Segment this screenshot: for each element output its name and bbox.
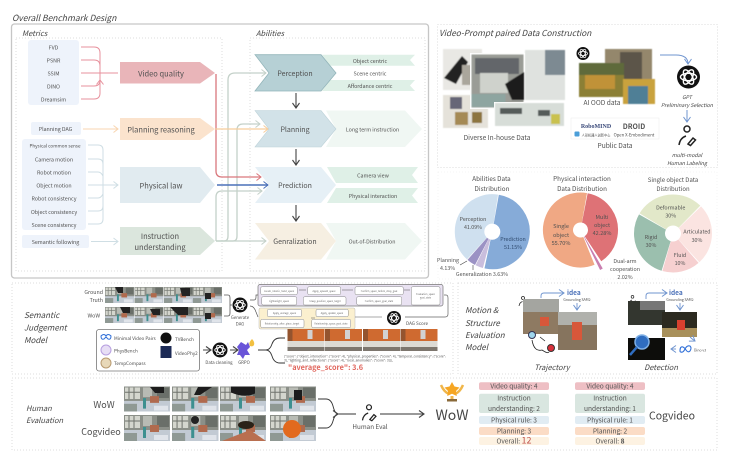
connector: instruction understanding to abilities xyxy=(216,73,266,241)
metric category: instruction understanding: Instruction xyxy=(141,231,179,242)
scores: WoW: Instruction xyxy=(497,392,531,402)
icon: GPT generate DAG xyxy=(232,298,248,312)
pie chart: single object data distribution: 30% xyxy=(646,241,656,249)
pie chart: single object data distribution: 10% xyxy=(675,259,685,267)
heading: human evaluation xyxy=(26,403,64,426)
logo: Grounding SAM2 detection: Grounding SAM2 xyxy=(666,298,694,303)
box: datasets: PhysBench xyxy=(114,348,138,354)
diagram: DAG evaluation: goal_state xyxy=(420,296,432,300)
pie chart: physical interaction data distribution: Physical interaction xyxy=(553,174,611,183)
panel: video-prompt paired data construction xyxy=(438,24,718,168)
metric category: instruction understanding xyxy=(120,227,215,255)
frame: motion dotted box xyxy=(458,283,717,374)
pie chart: physical interaction data distribution: Data Distribution xyxy=(557,184,607,193)
ability: prediction: Camera view xyxy=(357,172,390,180)
metric: planning DAG: Planning DAG xyxy=(39,125,73,133)
metric category: planning reasoning: Planning reasoning xyxy=(127,124,195,136)
ability: generalization: Out-of-Distribution xyxy=(349,238,395,246)
pie chart: physical interaction data distribution: Dual-arm xyxy=(613,257,637,265)
scores: Cogvideo: understanding: 1 xyxy=(584,403,636,413)
ability: perception: Affordance centric xyxy=(348,82,393,90)
icon: GPT DAG score xyxy=(387,311,401,325)
scores: WoW: Overall: 12 xyxy=(496,434,532,447)
box: datasets: TempCompass xyxy=(114,361,146,367)
pie chart: abilities data distribution: Prediction xyxy=(500,235,526,243)
logo: Grounding SAM2 trajectory xyxy=(541,287,591,310)
ability: prediction xyxy=(255,167,418,203)
text: multi-modal human labeling: multi-modal xyxy=(672,152,703,159)
panel: human evaluation xyxy=(12,378,717,450)
connector: physical law to prediction xyxy=(217,184,268,186)
images: detection xyxy=(628,296,697,373)
arrow: cleaning to GRPO xyxy=(230,349,238,351)
frame: abilities dotted box xyxy=(250,38,425,271)
diagram: DAG evaluation: Apply_average_space xyxy=(273,311,297,315)
box: datasets: TVBench xyxy=(175,336,194,343)
metric: semantic following: Semantic following xyxy=(32,238,79,246)
caption: Diverse In-house Data xyxy=(464,132,531,142)
arrow: human eval to results xyxy=(380,413,424,415)
scores: Cogvideo: Planning: 2 xyxy=(593,426,628,436)
panel: overall benchmark design xyxy=(12,12,428,278)
text: generate DAG xyxy=(231,315,250,328)
metric category: instruction understanding: understanding xyxy=(134,242,186,253)
box: datasets xyxy=(96,330,200,371)
logos: public data: Open X-Embodiment xyxy=(614,132,655,138)
video strip: generated frames xyxy=(288,329,438,351)
metrics: physical law group: Robot motion xyxy=(37,168,71,176)
label: metrics: Metrics xyxy=(22,28,49,39)
pie chart: physical interaction data distribution: object xyxy=(594,221,610,229)
arrow: to GPT selection xyxy=(660,55,688,64)
text: generate DAG: Generate xyxy=(231,315,250,321)
diagram: DAG evaluation: Confirm_space_before_drop_goal xyxy=(361,289,398,293)
metric category: video quality: Video quality xyxy=(138,68,184,80)
pie chart: abilities data distribution: Abilities Data xyxy=(472,174,511,183)
scores: WoW: Video quality: 4 xyxy=(490,380,538,390)
metrics: physical law group: Scene consistency xyxy=(32,221,77,229)
pie chart: physical interaction data distribution: Multi xyxy=(596,213,609,221)
metrics: video quality group: SSIM xyxy=(47,70,60,78)
text: DAG score: DAG Score xyxy=(406,321,428,327)
heading: data construction: Video-Prompt paired Data Construction xyxy=(439,27,592,39)
text: multi-modal human labeling: Human Labeling xyxy=(667,160,708,167)
heading: human evaluation: Human xyxy=(26,403,52,414)
pie chart: single object data distribution: Deformable xyxy=(656,204,685,212)
brace: strips to human eval xyxy=(318,399,356,428)
logos: public data xyxy=(571,118,659,150)
text: GPT preliminary selection xyxy=(661,94,714,109)
frame: data construction dotted box xyxy=(438,24,718,168)
metrics: video quality group: FVD xyxy=(49,44,59,52)
metrics: video quality group: Dreamsim xyxy=(41,96,66,104)
scores: WoW: Physical rule: 3 xyxy=(491,414,537,424)
text: multi-modal human labeling xyxy=(667,152,708,167)
logo: Grounding SAM2 detection xyxy=(646,287,694,310)
video strip: WoW xyxy=(87,307,222,323)
panel: motion and structure evaluation model xyxy=(458,283,717,374)
pie chart: single object data distribution: Single object Data xyxy=(648,175,698,184)
scores: WoW: understanding: 2 xyxy=(488,403,540,413)
logos: public data: 人形机器人创新中心 xyxy=(582,132,611,138)
pie chart: single object data distribution: 30% xyxy=(692,236,702,244)
arrow: datasets to cleaning xyxy=(203,349,211,351)
diagram: DAG evaluation: Apply_upward_space xyxy=(312,289,336,293)
video strip: Cogvideo xyxy=(81,415,316,441)
frame: distribution dotted box xyxy=(438,172,717,279)
panel: data distributions xyxy=(437,172,717,281)
pie chart: abilities data distribution: 4.13% xyxy=(440,264,455,272)
metric: semantic following xyxy=(22,235,118,248)
video strip: Cogvideo: Cogvideo xyxy=(81,425,121,438)
pie chart: single object data distribution xyxy=(640,175,711,267)
ability: prediction: Prediction xyxy=(278,181,312,191)
metrics: video quality group: PSNR xyxy=(47,56,61,64)
metric category: physical law xyxy=(120,167,215,203)
video strip: ground truth xyxy=(84,287,222,304)
box: datasets: Minimal Video Pairs xyxy=(114,335,156,342)
text: score json: 3}, "lighting_and_reflections": {"score": 4}, "local_anomalies": {"score": 3}}}, xyxy=(284,358,393,362)
heading: human evaluation: Evaluation xyxy=(26,415,64,426)
pie chart: physical interaction data distribution: object xyxy=(553,231,569,239)
diagram: DAG evaluation: Locate_robotic_hand_space xyxy=(264,289,295,293)
logo: Meta Dino v3: Dino v3 xyxy=(694,348,706,354)
logo: Grounding SAM2 detection: idea xyxy=(669,287,683,297)
icon: human labeling xyxy=(679,126,696,146)
pie chart: physical interaction data distribution: 2.02% xyxy=(617,273,633,281)
text: data cleaning: Data cleaning xyxy=(205,360,233,366)
frame: human evaluation dotted box xyxy=(12,378,717,450)
scores: WoW xyxy=(479,380,549,447)
heading: semantic judgement model: Judgement xyxy=(24,322,68,334)
video strip: ground truth: Truth xyxy=(90,296,103,304)
pie chart: physical interaction data distribution xyxy=(545,174,640,281)
logo: Meta Dino v3 xyxy=(671,337,706,354)
pie chart: physical interaction data distribution: Single xyxy=(553,222,569,230)
image collage: in-house data xyxy=(443,49,565,142)
heading: motion and structure evaluation model: Structure xyxy=(465,318,501,329)
metric: planning DAG xyxy=(31,122,118,135)
logo: Grounding SAM2 trajectory: Grounding SAM2 xyxy=(563,298,591,303)
pie chart: single object data distribution: Rigid xyxy=(645,233,657,241)
pie chart: abilities data distribution: Generalization 3.63% xyxy=(456,270,508,278)
scores: Cogvideo: Instruction xyxy=(593,392,627,402)
frame: semantic dotted box xyxy=(12,283,453,374)
ability: prediction: Physical interaction xyxy=(349,192,397,200)
pie chart: abilities data distribution: Planning xyxy=(437,256,459,264)
text: GPT preliminary selection: GPT xyxy=(682,94,693,101)
ability: generalization: Genralization xyxy=(273,237,317,247)
metrics: physical law group: Robot consistency xyxy=(32,194,77,202)
ability: perception: Scene centric xyxy=(354,70,387,78)
label: WoW winner: WoW xyxy=(435,405,469,425)
caption: Public Data xyxy=(598,140,633,150)
brace: GRPO outputs xyxy=(258,338,285,363)
scores: Cogvideo: Video quality: 4 xyxy=(586,380,634,390)
pie chart: single object data distribution: Articulated xyxy=(683,228,711,236)
heading: semantic judgement model: Semantic xyxy=(24,310,60,321)
connector: planning reasoning to planning xyxy=(215,128,268,130)
pie chart: abilities data distribution: 41.09% xyxy=(464,223,482,231)
metrics: physical law group: Physical common sense xyxy=(29,142,81,150)
icon: GRPO xyxy=(237,339,254,366)
logos: public data: DROID xyxy=(623,122,645,132)
text: human eval: Human Eval xyxy=(352,422,388,431)
pie chart: physical interaction data distribution: 42.28% xyxy=(593,229,611,237)
ability: perception: Perception xyxy=(277,69,313,79)
caption: AI OOD data xyxy=(584,97,621,107)
ability: perception: Object centric xyxy=(353,57,387,65)
frame: metrics dotted box xyxy=(16,38,222,271)
pie chart: physical interaction data distribution: cooperation xyxy=(610,265,640,273)
icon: GPT data cleaning xyxy=(212,342,228,358)
callout: average score: "average_score": 3.6 xyxy=(288,363,363,373)
box: datasets: VideoPhy2 xyxy=(175,350,198,357)
text: generate DAG: DAG xyxy=(236,322,244,328)
metrics: physical law group xyxy=(22,139,118,230)
metric category: planning reasoning xyxy=(120,118,215,140)
video strip: ground truth: Ground xyxy=(84,288,103,296)
brace: strips to DAG generation xyxy=(224,295,232,316)
metrics: video quality group xyxy=(28,40,118,105)
images: trajectory: Trajectory xyxy=(534,362,571,373)
scores: WoW: Planning: 3 xyxy=(497,426,532,436)
images: trajectory xyxy=(519,296,597,373)
connector: video quality to prediction xyxy=(216,74,261,177)
metrics: physical law group: Camera motion xyxy=(35,156,73,164)
ability: planning: Planning xyxy=(280,125,310,135)
pie chart: abilities data distribution xyxy=(437,174,526,278)
arrows: abilities flow xyxy=(295,93,297,221)
pie chart: physical interaction data distribution: 55.70% xyxy=(552,239,570,247)
logo: Grounding SAM2 trajectory: idea xyxy=(567,287,581,297)
metrics: physical law group: Object motion xyxy=(36,182,72,190)
panel: semantic judgement model xyxy=(12,283,453,374)
pie chart: abilities data distribution: 51.15% xyxy=(504,243,522,251)
scores: Cogvideo: Overall: 8 xyxy=(596,436,625,446)
heading: motion and structure evaluation model: Motion & xyxy=(465,305,500,316)
metrics: physical law group: Object consistency xyxy=(31,208,77,216)
video strip: WoW: WoW xyxy=(93,398,115,411)
heading: motion and structure evaluation model: Model xyxy=(465,342,490,353)
pie chart: single object data distribution: Fluid xyxy=(674,251,686,259)
pie chart: abilities data distribution: Perception xyxy=(460,215,486,223)
video strip: WoW: WoW xyxy=(87,312,100,320)
heading: semantic judgement model xyxy=(24,310,68,346)
frame: benchmark outer box xyxy=(12,24,428,278)
diagram: DAG evaluation: Relationship_after_place_target xyxy=(265,322,299,326)
diagram: DAG evaluation: Apply_update_space xyxy=(321,311,344,315)
logos: public data: RoboMIND xyxy=(581,124,612,130)
text: GPT preliminary selection: Preliminary Selection xyxy=(661,102,714,109)
icon: GRPO: GRPO xyxy=(238,360,250,366)
label: Cogvideo: Cogvideo xyxy=(649,408,695,424)
ability: planning: Long term instruction xyxy=(346,126,399,134)
diagram: DAG evaluation: Grasp_position_space_target xyxy=(309,299,341,303)
metric category: video quality xyxy=(120,62,215,84)
text: score json: {"score": {"object_interaction": {"score": 4}, "physical_properties": {"score": 4}, "temporal_consistency": {"score": xyxy=(284,354,446,358)
scores: Cogvideo: Physical rule: 1 xyxy=(587,414,633,424)
diagram: DAG evaluation: Evaluation_space xyxy=(416,292,436,296)
pie chart: single object data distribution: 30% xyxy=(665,212,676,220)
image collage: AI OOD data xyxy=(576,47,655,107)
heading: semantic judgement model: Model xyxy=(24,335,49,346)
video strip: WoW xyxy=(93,386,316,412)
metrics: video quality group: DINO xyxy=(47,82,60,90)
label: abilities: Abilities xyxy=(256,28,285,39)
metric category: physical law: Physical law xyxy=(140,180,182,192)
icon: trophy xyxy=(441,382,463,402)
icon: GPT xyxy=(677,66,700,88)
icon: human eval xyxy=(362,405,376,421)
heading: overall benchmark design: Overall Benchmark Design xyxy=(12,12,117,24)
text: score json xyxy=(284,354,446,362)
diagram: DAG evaluation xyxy=(250,284,448,329)
ability: planning xyxy=(255,110,422,147)
diagram: DAG evaluation: Confirm_space_goal_state xyxy=(365,299,394,303)
arrow: GPT to human labeling xyxy=(686,110,688,122)
ability: generalization xyxy=(255,223,422,260)
ability: perception xyxy=(255,55,415,91)
scores: Cogvideo xyxy=(575,380,645,446)
heading: motion and structure evaluation model: Evaluation xyxy=(465,330,506,341)
diagram: DAG evaluation: Lightweight_space xyxy=(269,299,290,303)
pie chart: abilities data distribution: Distribution xyxy=(475,184,510,193)
heading: motion and structure evaluation model xyxy=(465,305,506,353)
diagram: DAG evaluation: Relationship_space_goal_state xyxy=(314,322,348,326)
pie chart: single object data distribution: Distribution xyxy=(656,184,690,193)
images: detection: Detection xyxy=(644,362,678,373)
